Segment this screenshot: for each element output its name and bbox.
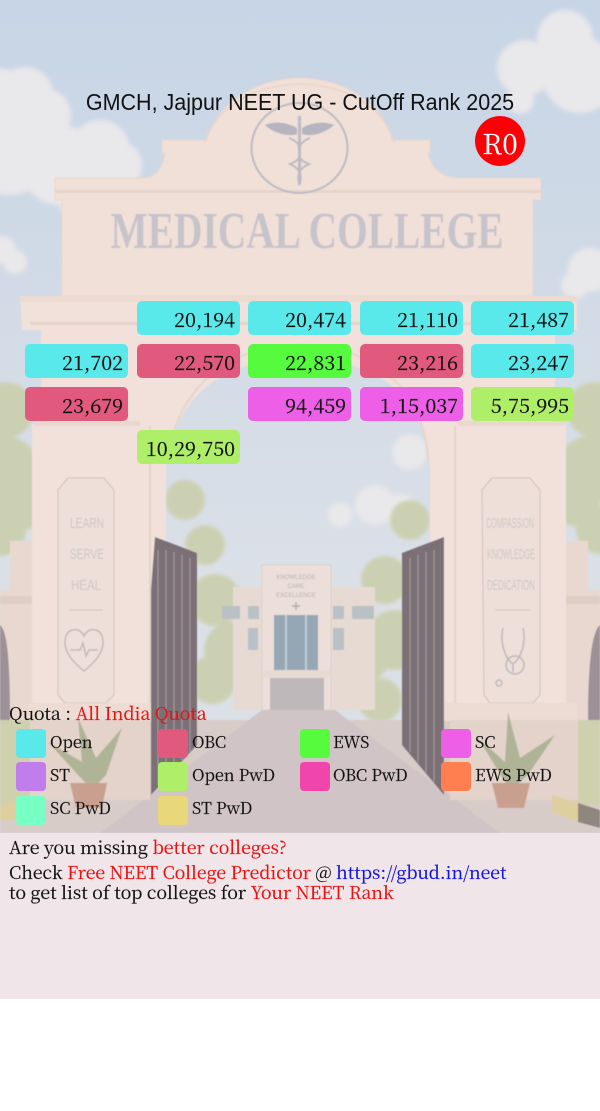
gate structure with arch: [20, 296, 577, 720]
background illustration: medical college gate: COMPASSION: [486, 515, 534, 532]
label: SC: SC: [475, 729, 495, 753]
swatch: OBC: [158, 729, 188, 758]
side wings: [0, 541, 600, 720]
swatch: ST PwD: [158, 796, 188, 825]
round badge R0: [475, 116, 525, 166]
rank cell: [137, 344, 240, 378]
title: GMCH, Jajpur NEET UG - CutOff Rank 2025: [86, 89, 514, 115]
label: OBC: OBC: [192, 729, 226, 753]
swatch: SC PwD: [16, 796, 46, 825]
quota heading: Quota : All India Quota: [9, 701, 207, 726]
label: SC PwD: SC PwD: [50, 795, 111, 819]
legend: [16, 729, 552, 825]
label: EWS: EWS: [333, 729, 369, 753]
promo line 2: Check Free NEET College Predictor @ https://gbud.in/neet: [9, 860, 506, 885]
background illustration: medical college gate: KNOWLEDGE: [276, 575, 316, 581]
label: OBC PwD: OBC PwD: [333, 762, 408, 786]
rank cell: [248, 344, 351, 378]
rank cell: 5,75,995: [491, 390, 569, 419]
swatch: Open: [16, 729, 46, 758]
rank cell: 20,194: [174, 304, 235, 333]
top facade: [55, 78, 541, 296]
pillar panels: [58, 478, 114, 703]
rank cell: 23,679: [62, 390, 123, 419]
rank cell: [471, 344, 574, 378]
swatch: OBC PwD: [300, 762, 330, 791]
rank cell: 23,247: [508, 347, 569, 376]
rank cell: 20,474: [285, 304, 346, 333]
label: Open: Open: [50, 729, 93, 753]
rank cell: [248, 387, 351, 421]
rank cell: [471, 301, 574, 335]
rank cell: 21,487: [508, 304, 569, 333]
background illustration: medical college gate: EXCELLENCE: [276, 593, 316, 599]
caduceus emblem: [252, 103, 348, 193]
rank cell: 1,15,037: [380, 390, 458, 419]
background illustration: medical college gate: HEAL: [71, 577, 101, 594]
cutoff rank grid: [25, 301, 574, 464]
rank cell: 10,29,750: [146, 433, 235, 462]
background illustration: medical college gate: [0, 0, 600, 833]
rank cell: 22,831: [285, 347, 346, 376]
kerbs: [0, 800, 16, 820]
round badge R0: R0: [482, 123, 518, 163]
background illustration: medical college gate: LEARN: [70, 515, 104, 532]
rank cell: 23,216: [397, 347, 458, 376]
label: ST PwD: ST PwD: [192, 795, 252, 819]
swatch: SC: [441, 729, 471, 758]
label: EWS PwD: EWS PwD: [475, 762, 552, 786]
rank cell: [360, 301, 463, 335]
clouds: [0, 10, 600, 527]
rank cell: 94,459: [285, 390, 346, 419]
label: Open PwD: Open PwD: [192, 762, 275, 786]
gates: [151, 537, 197, 795]
rank cell: 22,570: [174, 347, 235, 376]
promo line 3: to get list of top colleges for Your NEET Rank: [9, 880, 394, 905]
potted plants: [48, 718, 122, 790]
promo panel: [0, 833, 600, 999]
rank cell: [471, 387, 574, 421]
swatch: Open PwD: [158, 762, 188, 791]
swatch: EWS: [300, 729, 330, 758]
rank cell: [360, 387, 463, 421]
rank cell: [137, 301, 240, 335]
swatch: EWS PwD: [441, 762, 471, 791]
rank cell: 21,702: [62, 347, 123, 376]
promo line 1: Are you missing better colleges?: [9, 835, 287, 860]
rank cell: 21,110: [397, 304, 458, 333]
far building: [233, 587, 375, 710]
rank cell: [25, 387, 128, 421]
rank cell: [25, 344, 128, 378]
rank cell: [248, 301, 351, 335]
ground: [0, 720, 600, 833]
background illustration: medical college gate: KNOWLEDGE: [487, 546, 535, 563]
rank cell: [360, 344, 463, 378]
background illustration: medical college gate: DEDICATION: [487, 577, 535, 594]
background illustration: medical college gate: CARE: [288, 584, 304, 590]
side trees: [0, 382, 600, 722]
background illustration: medical college gate: SERVE: [70, 546, 104, 563]
swatch: ST: [16, 762, 46, 791]
label: ST: ST: [50, 762, 70, 786]
